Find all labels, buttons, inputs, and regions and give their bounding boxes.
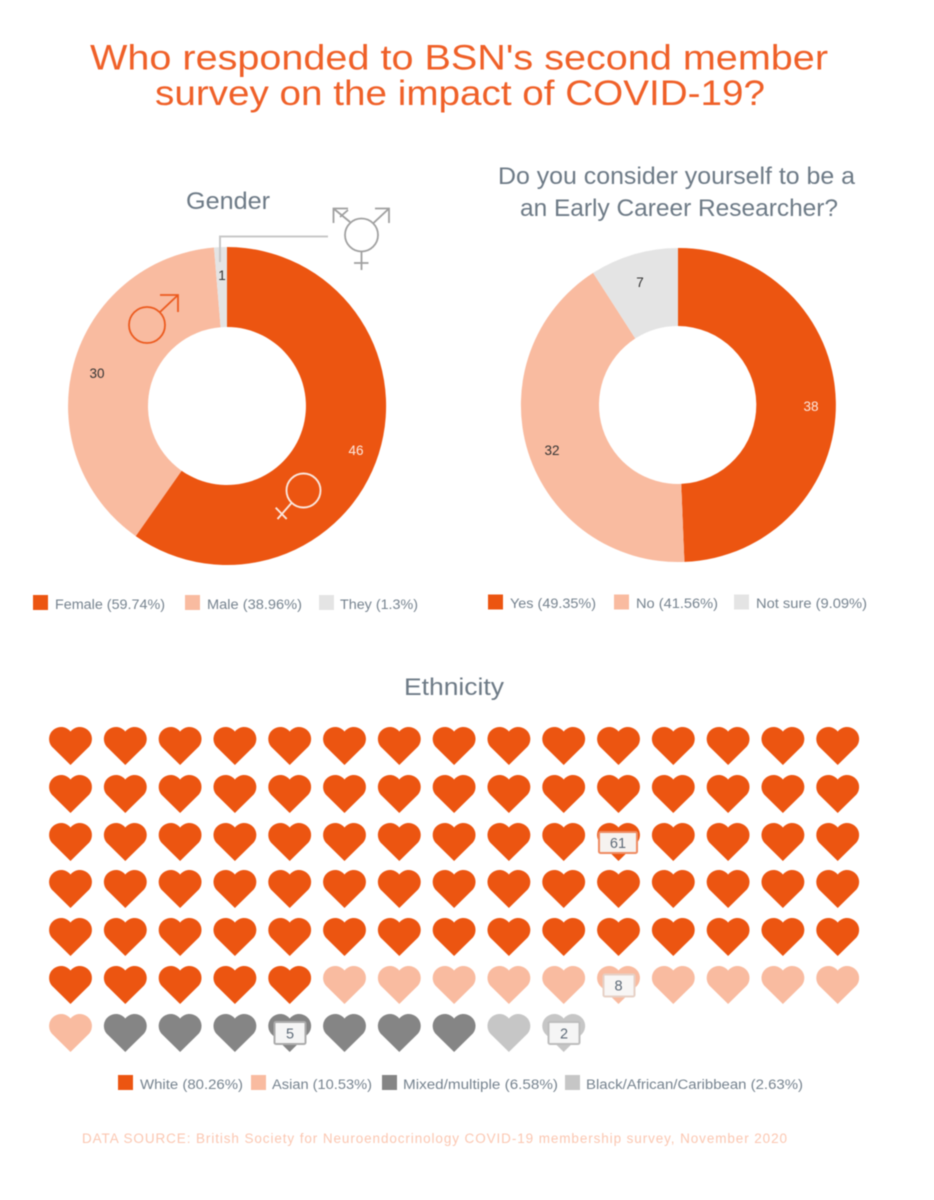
icon: female symbol bbox=[276, 474, 320, 519]
tooltip: 2: 2 bbox=[560, 1026, 568, 1042]
title: Who responded to BSN's second member bbox=[90, 38, 828, 78]
legend: early career researcher: Yes (49.35%) bbox=[510, 596, 596, 611]
legend: early career researcher: Not sure (9.09%) bbox=[756, 596, 867, 611]
callout line: they bbox=[220, 236, 328, 262]
legend: ethnicity: Black/African/Caribbean (2.63%) bbox=[586, 1077, 803, 1092]
heart chart: black african caribbean bbox=[487, 1014, 585, 1052]
donut chart: early career researcher: 7 bbox=[636, 275, 644, 290]
legend: ethnicity bbox=[118, 1075, 803, 1092]
data source footer: DATA SOURCE: British Society for Neuroendocrinology COVID-19 membership survey, November 2020 bbox=[82, 1131, 787, 1146]
panel: gender bbox=[33, 188, 418, 612]
legend: ethnicity: White (80.26%) bbox=[140, 1077, 243, 1092]
tooltip: 8 bbox=[604, 974, 634, 996]
icon: transgender symbol bbox=[334, 208, 389, 270]
heading: early career researcher bbox=[498, 163, 856, 222]
legend: ethnicity: Asian (10.53%) bbox=[272, 1077, 372, 1092]
tooltip: 61: 61 bbox=[610, 836, 626, 852]
legend: early career researcher: No (41.56%) bbox=[636, 596, 718, 611]
donut chart: gender: 30 bbox=[89, 366, 105, 381]
title bbox=[90, 38, 828, 113]
panel: early career researcher bbox=[488, 163, 867, 611]
tooltip: 61 bbox=[599, 832, 637, 853]
legend: gender: Male (38.96%) bbox=[207, 597, 302, 612]
legend: ethnicity: Mixed/multiple (6.58%) bbox=[403, 1077, 558, 1092]
heading: early career researcher: Do you consider yourself to be a bbox=[498, 163, 856, 190]
legend: gender bbox=[33, 595, 418, 612]
donut chart: gender: 1 bbox=[218, 268, 226, 283]
heart chart: white bbox=[49, 727, 859, 1004]
icon: male symbol bbox=[129, 295, 178, 343]
donut chart: gender bbox=[68, 247, 386, 565]
heart chart: mixed bbox=[104, 1014, 476, 1052]
legend: early career researcher bbox=[488, 594, 867, 611]
donut chart: gender: 46 bbox=[348, 443, 364, 458]
tooltip: 8: 8 bbox=[614, 978, 623, 994]
heading: early career researcher: an Early Career Researcher? bbox=[520, 195, 838, 222]
tooltip: 2 bbox=[548, 1022, 580, 1044]
heart chart: asian bbox=[49, 966, 859, 1052]
heading: ethnicity: Ethnicity bbox=[404, 674, 504, 701]
title: survey on the impact of COVID-19? bbox=[155, 74, 765, 113]
donut chart: early career researcher bbox=[521, 248, 836, 562]
legend: gender: Female (59.74%) bbox=[55, 597, 165, 612]
donut chart: early career researcher: 38 bbox=[803, 399, 819, 414]
tooltip: 5: 5 bbox=[286, 1026, 294, 1042]
panel: ethnicity bbox=[49, 674, 859, 1092]
tooltip: 5 bbox=[274, 1022, 306, 1044]
heading: gender: Gender bbox=[186, 188, 270, 215]
donut chart: early career researcher: 32 bbox=[544, 443, 560, 458]
legend: gender: They (1.3%) bbox=[340, 597, 418, 612]
